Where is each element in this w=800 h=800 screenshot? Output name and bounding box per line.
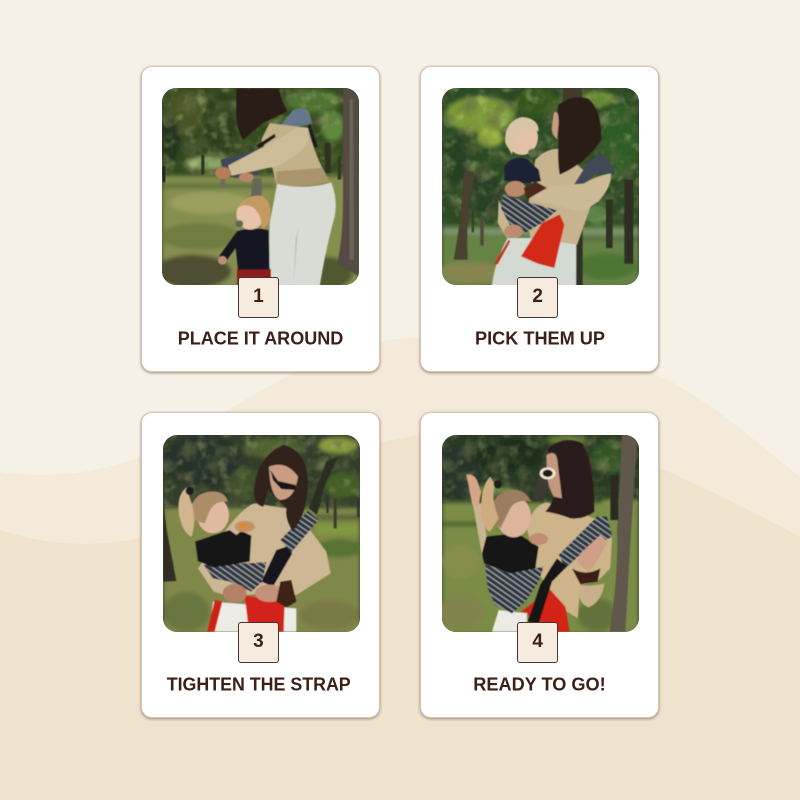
sling body	[204, 562, 267, 592]
hair	[557, 97, 601, 175]
red jacket	[521, 215, 564, 268]
number badge 3	[238, 622, 279, 663]
photo: mother picking up the toddler into the sling	[442, 88, 639, 285]
torso and arms	[198, 503, 331, 597]
sling body	[501, 195, 557, 234]
sling shoulder	[570, 153, 614, 192]
number badge 3: 3	[253, 631, 264, 652]
heading: pick them up: PICK THEM UP	[475, 327, 605, 348]
hair	[237, 89, 287, 140]
panel: step 3	[141, 412, 380, 718]
heading: ready to go: READY TO GO!	[473, 674, 606, 694]
pants	[491, 238, 576, 287]
sling front	[221, 147, 268, 178]
panel: step 4	[420, 412, 659, 718]
sling body	[485, 564, 543, 613]
number badge 2: 2	[532, 286, 543, 307]
panel: step 1	[141, 66, 380, 372]
red	[520, 590, 569, 632]
hands	[223, 584, 247, 603]
torso	[527, 502, 612, 618]
strap	[558, 517, 612, 568]
waving hand and scrunchie	[577, 535, 607, 572]
arm	[530, 174, 611, 213]
panel: step 2	[420, 66, 659, 372]
arm	[228, 127, 308, 176]
torso	[262, 123, 330, 186]
pants and red	[210, 602, 297, 632]
sling strap	[281, 511, 319, 552]
photo: mother placing the sling around her shoulder beside the toddler	[162, 88, 359, 285]
toddler	[237, 269, 271, 287]
heading: tighten the strap: TIGHTEN THE STRAP	[167, 674, 351, 694]
number badge 4: 4	[532, 631, 543, 652]
heading: place it around: PLACE IT AROUND	[178, 327, 343, 348]
sling back	[278, 109, 313, 128]
number badge 2	[517, 277, 558, 318]
toddler	[504, 158, 541, 184]
toddler	[196, 530, 252, 568]
number badge 4	[517, 622, 558, 663]
pants	[270, 183, 336, 287]
raised arm	[473, 503, 488, 555]
photo: mother tightening the sling strap with toddler on hip	[163, 435, 360, 632]
number badge 1	[238, 277, 279, 318]
hair and face	[254, 445, 308, 532]
toddler	[482, 533, 538, 573]
photo: mother waving with toddler secure in the sling	[442, 435, 639, 632]
hair and face	[545, 440, 594, 519]
pants	[492, 610, 527, 632]
torso	[527, 149, 592, 245]
hands	[504, 181, 526, 197]
number badge 1: 1	[253, 286, 264, 307]
